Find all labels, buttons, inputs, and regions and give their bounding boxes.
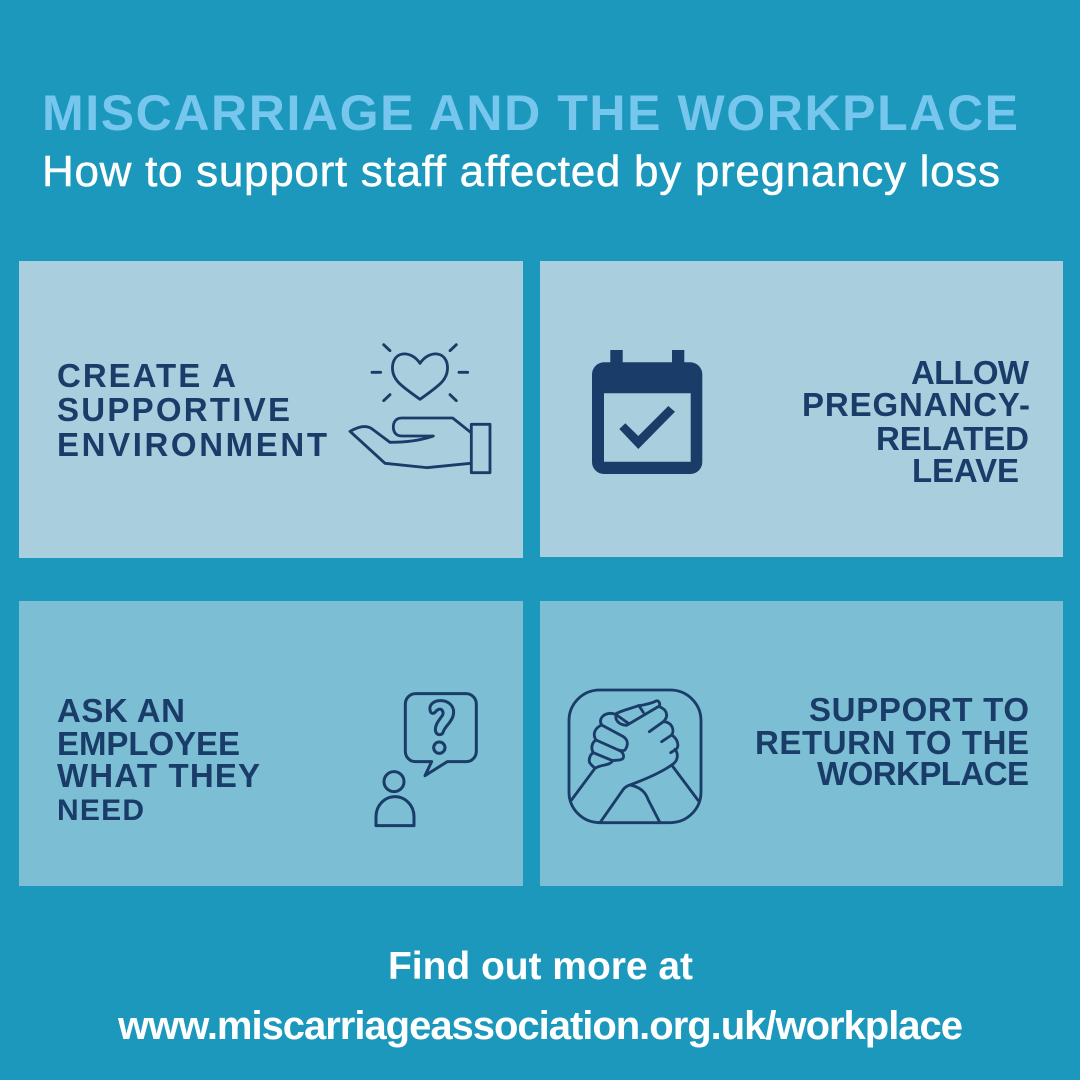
heading: create a supportive environment: CREATE A [57,357,236,394]
heading: create a supportive environment: SUPPORTIVE [57,391,290,428]
icon: calendar with check mark [592,350,702,474]
heading: support to return to the workplace: SUPPORT TO [809,691,1029,728]
footer call to action: Find out more at [388,945,693,988]
heading: support to return to the workplace: WORKPLACE [817,755,1029,792]
heading: allow pregnancy-related leave: RELATED [876,420,1029,457]
heading: ask an employee what they need: EMPLOYEE [57,725,240,762]
heading: support to return to the workplace: RETURN TO THE [755,724,1029,761]
heading: allow pregnancy-related leave [802,354,1030,489]
icon: clasped hands in rounded square [569,690,701,823]
heading: support to return to the workplace [755,691,1029,792]
icon: heart above open hand [350,345,490,473]
panel: allow pregnancy-related leave [540,261,1063,557]
heading: ask an employee what they need [57,692,260,827]
panel: support to return to the workplace [540,601,1063,886]
panel: create a supportive environment [19,261,523,558]
icon: person with question speech bubble [376,694,476,826]
heading: allow pregnancy-related leave: ALLOW [911,354,1030,391]
heading: ask an employee what they need: ASK AN [57,692,185,729]
heading: create a supportive environment [57,357,327,463]
title: MISCARRIAGE AND THE WORKPLACE [42,85,1018,141]
heading: allow pregnancy-related leave: PREGNANCY- [802,386,1030,423]
panel: ask an employee what they need [19,601,523,886]
heading: ask an employee what they need: WHAT THEY [57,757,260,794]
subtitle: How to support staff affected by pregnancy loss [42,147,1000,196]
heading: create a supportive environment: ENVIRONMENT [57,426,327,463]
heading: ask an employee what they need: NEED [57,794,144,827]
footer call to action [117,945,963,1048]
footer call to action: www.miscarriageassociation.org.uk/workplace [117,1004,963,1048]
heading: allow pregnancy-related leave: LEAVE [912,452,1019,489]
